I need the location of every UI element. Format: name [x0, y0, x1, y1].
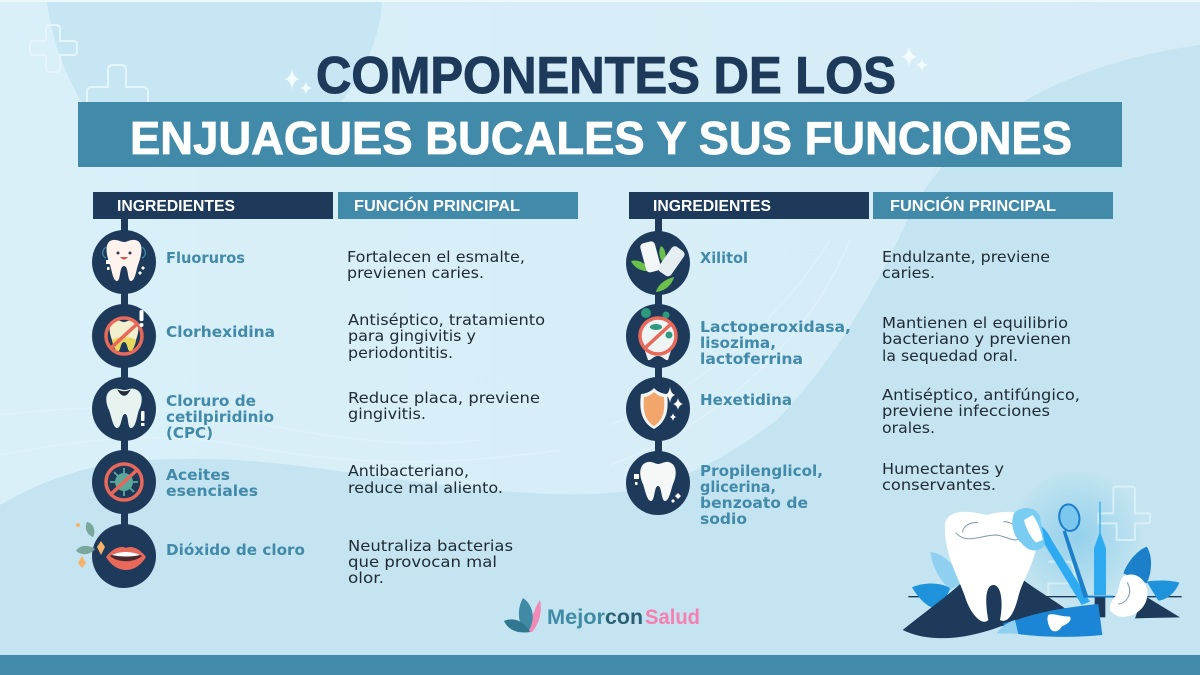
label: Propilenglicol, glicerina, benzoato de sodio: glicerina, [700, 478, 776, 496]
title line 1: COMPONENTES DE LOS [316, 47, 896, 105]
description: Lactoperoxidasa: la sequedad oral. [882, 347, 1018, 365]
label: Propilenglicol, glicerina, benzoato de sodio: benzoato de [700, 494, 808, 512]
icon: shield [626, 377, 690, 441]
description: Hexetidina: previene infecciones [882, 402, 1050, 420]
description: Propilenglicol [882, 460, 1004, 494]
label: Cloruro de cetilpiridinio (CPC): (CPC) [166, 424, 213, 442]
label: Lactoperoxidasa, lisozima, lactoferrina: lactoferrina [700, 350, 803, 368]
description: Hexetidina: Antiséptico, antifúngico, [882, 386, 1080, 404]
table header right: ingredientes: INGREDIENTES [653, 198, 771, 215]
description: Fluoruros [347, 248, 525, 282]
table header right: funcion principal: FUNCIÓN PRINCIPAL [890, 196, 1056, 215]
description: Cloruro de cetilpiridinio [348, 389, 540, 423]
label: Xilitol: Xilitol [700, 249, 748, 267]
icon: white tooth [626, 451, 690, 515]
logo: Mejor con Salud [504, 598, 700, 633]
table header left: ingredientes [93, 192, 333, 219]
description: Clorhexidina: periodontitis. [348, 344, 453, 362]
label: Aceites esenciales: Aceites [166, 466, 230, 484]
label: Cloruro de cetilpiridinio (CPC): cetilpiridinio [166, 408, 274, 426]
illustration: tooth with dental tools [903, 470, 1182, 638]
label: Fluoruros: Fluoruros [166, 249, 245, 267]
icon: lips with leaves [76, 522, 156, 588]
label: Lactoperoxidasa, lisozima, lactoferrina [700, 318, 851, 368]
label: Propilenglicol, glicerina, benzoato de sodio: Propilenglicol, [700, 462, 823, 480]
description: Dioxido de cloro: que provocan mal [348, 553, 497, 571]
description: Xilitol: Endulzante, previene [882, 248, 1050, 266]
logo: Mejor con Salud: Mejor [547, 606, 605, 629]
left column connector [121, 219, 128, 539]
icon: happy tooth [92, 230, 156, 294]
description: Aceites esenciales: Antibacteriano, [348, 462, 469, 480]
footer bar [0, 655, 1200, 675]
description: Xilitol [882, 248, 1050, 282]
logo: Mejor con Salud: Salud [645, 606, 700, 629]
description: Dioxido de cloro: olor. [348, 569, 384, 587]
description: Aceites esenciales [348, 462, 503, 497]
description: Propilenglicol: Humectantes y [882, 460, 1004, 478]
icon: chewing gum and mint [626, 231, 690, 295]
icon: germ crossed out [92, 450, 156, 514]
label: Aceites esenciales [166, 466, 258, 500]
table header left: ingredientes: INGREDIENTES [117, 198, 235, 215]
decorative crosses top left [30, 25, 148, 103]
description: Hexetidina: orales. [882, 419, 935, 437]
label: Dioxido de cloro: Dióxido de cloro [166, 541, 305, 559]
title sparkles [284, 46, 928, 95]
description: Dioxido de cloro [348, 537, 513, 587]
label: Clorhexidina: Clorhexidina [166, 323, 275, 341]
label: Propilenglicol, glicerina, benzoato de sodio: sodio [700, 510, 747, 528]
description: Hexetidina [882, 386, 1080, 437]
table header right: funcion principal [873, 192, 1113, 219]
description: Lactoperoxidasa [882, 314, 1071, 365]
description: Clorhexidina: para gingivitis y [348, 327, 476, 345]
description: Propilenglicol: conservantes. [882, 476, 996, 494]
description: Aceites esenciales: reduce mal aliento. [348, 479, 503, 497]
label: Cloruro de cetilpiridinio (CPC) [166, 392, 274, 442]
logo: Mejor con Salud: con [605, 606, 643, 629]
right column connector [655, 219, 662, 469]
description: Fluoruros: Fortalecen el esmalte, [347, 248, 525, 266]
description: Fluoruros: previenen caries. [347, 264, 484, 282]
title banner: ENJUAGUES BUCALES Y SUS FUNCIONES [130, 112, 1072, 164]
label: Lactoperoxidasa, lisozima, lactoferrina: lisozima, [700, 334, 776, 352]
label: Aceites esenciales: esenciales [166, 482, 258, 500]
description: Lactoperoxidasa: bacteriano y previenen [882, 330, 1071, 348]
label: Cloruro de cetilpiridinio (CPC): Cloruro de [166, 392, 256, 410]
icon: tooth with bacteria crossed out [626, 304, 690, 368]
description: Cloruro de cetilpiridinio: Reduce placa, previene [348, 389, 540, 407]
description: Xilitol: caries. [882, 264, 935, 282]
description: Clorhexidina: Antiséptico, tratamiento [348, 311, 545, 329]
table header left: funcion principal [338, 192, 578, 219]
table header left: funcion principal: FUNCIÓN PRINCIPAL [354, 196, 520, 215]
description: Cloruro de cetilpiridinio: gingivitis. [348, 405, 426, 423]
description: Clorhexidina [348, 311, 545, 362]
label: Propilenglicol, glicerina, benzoato de sodio [700, 462, 823, 528]
description: Dioxido de cloro: Neutraliza bacterias [348, 537, 513, 555]
icon: yellow tooth crossed out [92, 304, 156, 368]
label: Lactoperoxidasa, lisozima, lactoferrina: Lactoperoxidasa, [700, 318, 851, 336]
icon: tooth with cavity [92, 377, 156, 441]
label: Hexetidina: Hexetidina [700, 391, 792, 409]
description: Lactoperoxidasa: Mantienen el equilibrio [882, 314, 1068, 332]
table header right: ingredientes [629, 192, 869, 219]
